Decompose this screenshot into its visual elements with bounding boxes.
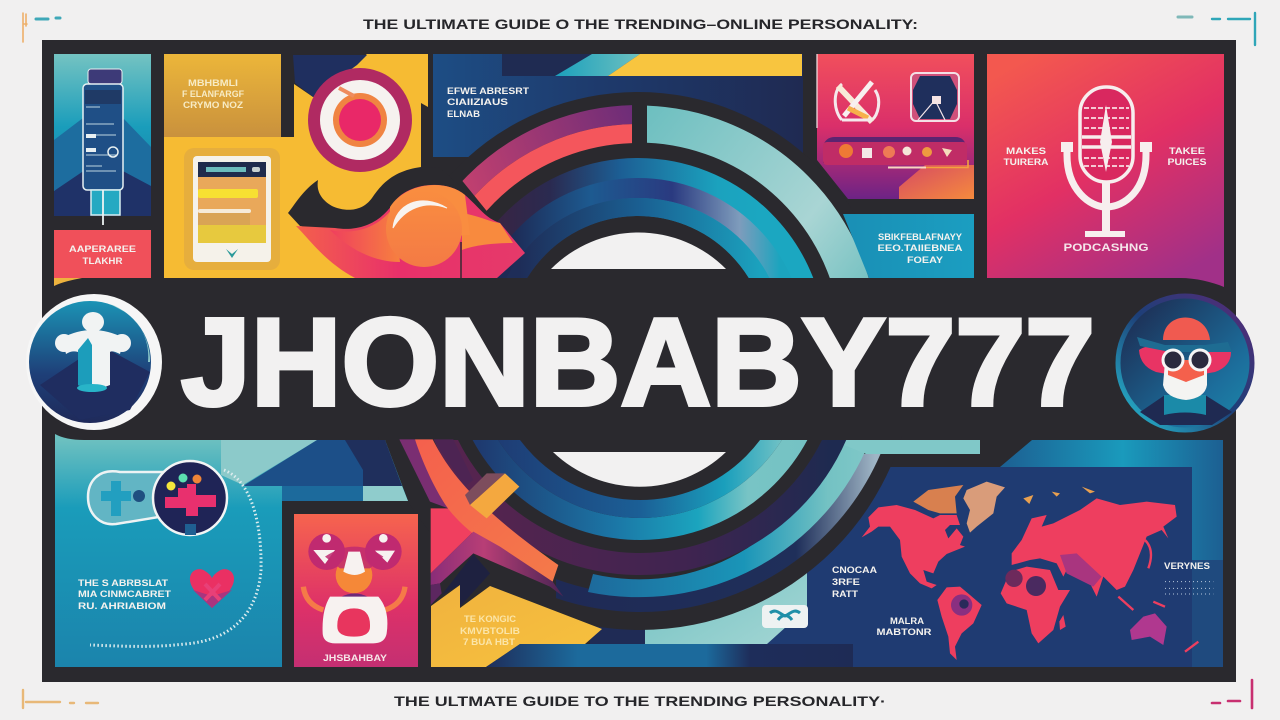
- centre band: [42, 278, 1236, 436]
- icon: heart: [190, 569, 234, 608]
- icon: picture frame: [911, 73, 959, 121]
- icon: syringe: [83, 69, 123, 225]
- panel: teal text: [843, 214, 974, 278]
- arcs: upper rings: [462, 105, 869, 278]
- panel: gamepad: MIA CINMCABRET: [78, 589, 171, 600]
- panel: gold text: [164, 54, 281, 137]
- white half circle top: [551, 232, 726, 269]
- panel: teal text: EEO.TAIIEBNEA: [878, 243, 963, 254]
- title: JHONBABY777: [181, 294, 1095, 432]
- map: world continents: [862, 482, 1213, 660]
- panel: podcasting: PODCASHNG: [1064, 242, 1148, 254]
- shape: crossing bands: [399, 439, 563, 607]
- dark disc behind lower arcs: [590, 467, 890, 630]
- panel: gold text: F ELANFARGF: [182, 89, 244, 100]
- dark disc behind upper arcs: [468, 92, 803, 160]
- corner: yellow wedge: [54, 278, 82, 286]
- lower band strip: [486, 644, 853, 667]
- panel: gamepad: RU. AHRIABIOM: [78, 601, 166, 612]
- panel: yellow lower centre: TE KONGIC: [464, 614, 516, 625]
- panel: map: [590, 440, 1223, 667]
- map labels: CNOCAA: [832, 565, 877, 576]
- corner: pink wedge: [1180, 278, 1224, 287]
- panel: yellow with tablet and logo: [164, 54, 428, 278]
- dotted arc: [90, 470, 261, 646]
- panel: navy top centre: CIAIIZIAUS: [447, 97, 508, 108]
- icon: microphone: [1061, 87, 1152, 237]
- badge: left avatar: [26, 294, 162, 430]
- panel: podcasting: PUICES: [1168, 157, 1206, 168]
- panel: navy top centre: [433, 54, 803, 160]
- top heading: THE ULTIMATE GUIDE O THE TRENDING–ONLINE PERSONALITY:: [363, 16, 918, 32]
- panel: red caption: AAPERAREE: [69, 244, 136, 255]
- shape: dark blob and cloud: [288, 167, 525, 278]
- panel: navy top centre: EFWE ABRESRT: [447, 86, 529, 97]
- map labels: RATT: [832, 589, 858, 600]
- icon: ring logo: [308, 68, 412, 172]
- pale teal wedge: [645, 540, 807, 644]
- panel: teal text: SBIKFEBLAFNAYY: [878, 232, 963, 243]
- panel: yellow lower centre: 7 BUA HBT: [463, 637, 515, 648]
- panel: red caption: [54, 230, 151, 278]
- icon: crossed heart: [835, 82, 879, 122]
- panel: podcasting: [987, 54, 1224, 278]
- panel: podcasting: TUIRERA: [1004, 157, 1049, 168]
- map labels: 3RFE: [832, 577, 860, 588]
- panel: gamepad: THE S ABRBSLAT: [78, 578, 168, 589]
- panel: yellow lower centre: KMVBTOLIB: [460, 626, 520, 637]
- panel: gold text: CRYMO NOZ: [183, 100, 243, 111]
- badge: right avatar: [1118, 296, 1252, 430]
- arcs: lower rings: [434, 440, 980, 612]
- panel: gamepad: [55, 440, 408, 667]
- panel: syringe: [54, 54, 151, 225]
- panel: podcasting: TAKEE: [1169, 146, 1205, 157]
- bottom heading: THE ULTMATE GUIDE TO THE TRENDING PERSONALITY·: [394, 693, 886, 709]
- map labels: VERYNES: [1164, 561, 1210, 572]
- map labels: MABTONR: [876, 627, 932, 638]
- corner: teal wedge: [55, 434, 84, 440]
- icon: small chat box: [762, 605, 808, 628]
- panel: navy top centre: ELNAB: [447, 109, 480, 120]
- map labels: [832, 561, 1210, 638]
- panel: character: JHSBAHBAY: [323, 653, 388, 664]
- panel: yellow lower centre: [431, 585, 602, 667]
- panel: gold text: MBHBMLI: [188, 78, 238, 89]
- panel: pink icons: [817, 54, 974, 199]
- panel: character: [294, 514, 418, 667]
- icon: cartoon character: [303, 533, 405, 643]
- map labels: MALRA: [890, 616, 924, 627]
- panel: podcasting: MAKES: [1006, 146, 1046, 157]
- icon: tablet: [184, 148, 280, 270]
- white half circle bottom: [553, 452, 726, 487]
- icon: game controller: [88, 461, 227, 535]
- panel: red caption: TLAKHR: [82, 256, 123, 267]
- toolbar: [823, 137, 968, 168]
- panel: teal text: FOEAY: [907, 255, 944, 266]
